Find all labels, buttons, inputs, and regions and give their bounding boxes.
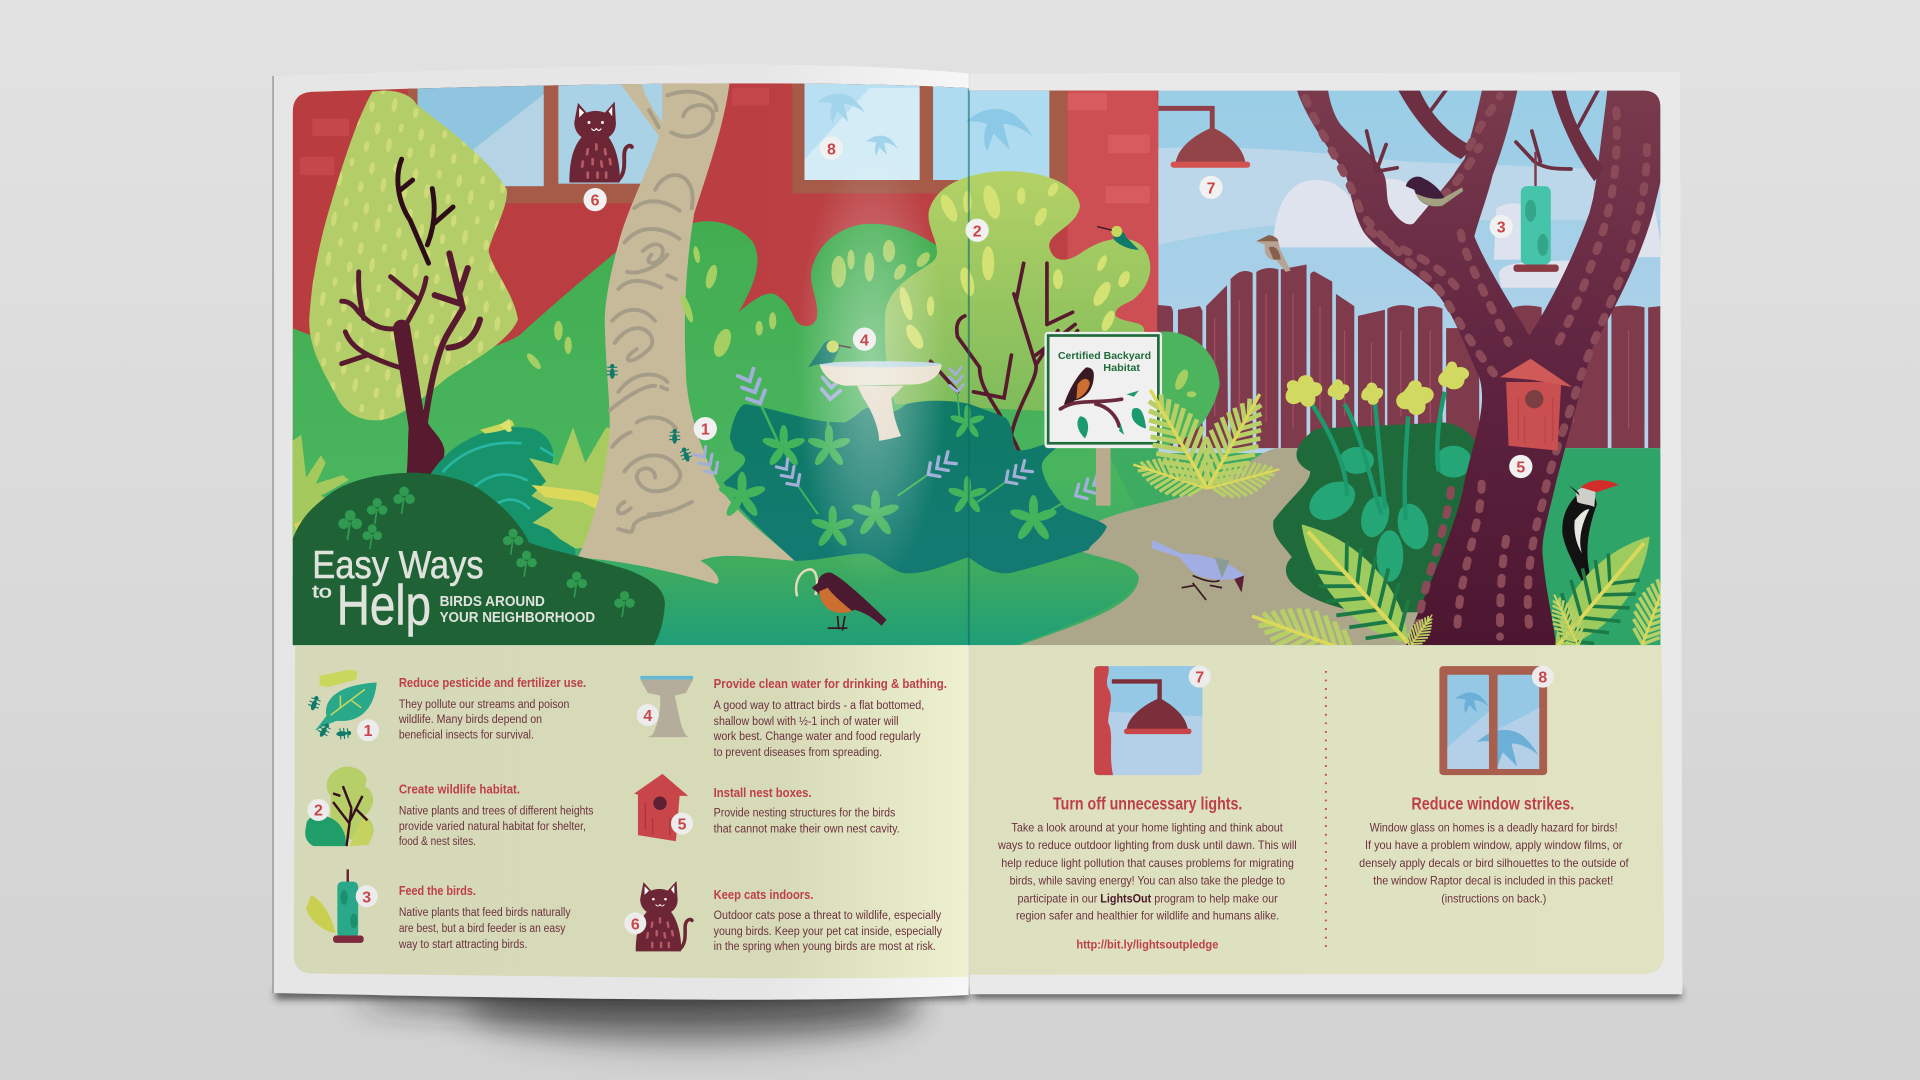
window text: (instructions on back.) [1441, 891, 1546, 905]
tip 5 icon [634, 774, 693, 841]
tip 3 text: Feed the birds. [399, 884, 476, 898]
lamp icon 7: 7 [1195, 670, 1204, 687]
wall lamp [1158, 108, 1250, 168]
beetles on trunk [607, 364, 694, 464]
lights text: birds, while saving energy! You can also take the pledge to [1010, 874, 1285, 888]
tip 4 text: Provide clean water for drinking & bathing. [714, 677, 947, 691]
left window [408, 81, 662, 203]
tip 4 text: shallow bowl with ½-1 inch of water will [714, 715, 899, 728]
window text: Reduce window strikes. [1411, 793, 1574, 813]
tip 2 icon: 2 [314, 803, 323, 820]
hummingbird at bath [808, 340, 851, 367]
map number badges: 1 [701, 422, 710, 439]
tip 6 text: Keep cats indoors. [714, 888, 813, 902]
map number badges: 4 [860, 332, 869, 349]
feeder [1513, 152, 1559, 272]
window text: If you have a problem window, apply window films, or [1365, 838, 1622, 852]
right lawn [1542, 448, 1660, 646]
tip 5 icon: 5 [678, 816, 687, 833]
cat in window [569, 102, 632, 182]
panel: left page sheet [273, 65, 969, 1000]
lights text: region safer and healthier for wildlife and humans alike. [1016, 909, 1279, 923]
tip 6 text [714, 888, 942, 953]
tip 3 text [398, 884, 571, 951]
dotted divider [1325, 671, 1327, 954]
tip 2 text: food & nest sites. [399, 835, 476, 848]
panel: right page sheet [970, 72, 1682, 994]
tip 6 text: in the spring when young birds are most at risk. [714, 940, 936, 953]
shrub: title background [293, 473, 665, 645]
tip 1 text [398, 676, 586, 741]
tip 2 text: Native plants and trees of different heights [399, 804, 594, 817]
tip 4 icon [637, 676, 693, 737]
clover leaves [338, 486, 635, 617]
clouds [1273, 179, 1660, 288]
grasshopper [480, 419, 514, 433]
fence [1157, 264, 1660, 448]
right window with decals [792, 76, 1068, 193]
brick column [1068, 76, 1161, 331]
blue jay [1152, 540, 1244, 600]
grey bird on branch [1406, 177, 1463, 206]
tip 5 text: Install nest boxes. [714, 786, 812, 800]
foreground ferns [1243, 501, 1688, 680]
lights text: help reduce light pollution that causes problems for migrating [1001, 856, 1294, 870]
robin with worm [796, 569, 887, 631]
green bush spots [525, 240, 933, 371]
tip 3 text: Native plants that feed birds naturally [399, 906, 571, 919]
tip 1 text: beneficial insects for survival. [399, 728, 534, 741]
tip 6 text: young birds. Keep your pet cat inside, especially [714, 925, 942, 938]
title [312, 544, 595, 636]
tip 4 icon: 4 [643, 708, 652, 725]
tip 1 text: Reduce pesticide and fertilizer use. [399, 676, 586, 690]
book shadow [276, 970, 1681, 1043]
tip 5 text: that cannot make their own nest cavity. [714, 823, 900, 836]
sign fern [1132, 389, 1280, 498]
sign: certified backyard habitat: Certified Backyard [1058, 350, 1151, 362]
tip 2 text: Create wildlife habitat. [399, 782, 520, 796]
teal swirl plant [429, 427, 576, 561]
hummingbird on bush [1097, 226, 1139, 250]
lights text: ways to reduce outdoor lighting from dusk until dawn. This will [997, 838, 1297, 852]
map number badges: 6 [591, 193, 600, 210]
lawn and hill [293, 221, 1139, 645]
tip 6 icon: 6 [631, 916, 640, 933]
bush branches [931, 263, 1078, 451]
map number badges: 2 [973, 223, 982, 240]
tip 4 text: work best. Change water and food regularly [713, 730, 921, 743]
title: BIRDS AROUND [440, 594, 545, 610]
yellow ferns left [293, 427, 612, 551]
grass bottom band [293, 553, 1139, 645]
window text: the window Raptor decal is included in this packet! [1373, 874, 1613, 888]
teal bush with lavender [694, 366, 1107, 573]
tip 2 text [399, 782, 594, 848]
nest box [1500, 359, 1572, 451]
lamp icon 7 [1094, 666, 1211, 775]
gutter highlight [796, 147, 948, 588]
tip 3 icon [306, 869, 378, 943]
title: Easy Ways [312, 544, 484, 587]
sparrow on fence [1256, 235, 1291, 272]
left tree [342, 159, 480, 478]
small bush behind sign [1157, 332, 1220, 447]
panel: right tips [970, 645, 1664, 975]
sign: certified backyard habitat: Habitat [1103, 362, 1141, 374]
tip 4 text [713, 677, 947, 759]
title: to [312, 582, 332, 602]
lights text [997, 793, 1297, 951]
tip 1 text: wildlife. Many birds depend on [398, 713, 542, 726]
tip 3 text: way to start attracting birds. [398, 938, 527, 951]
tip 1 icon [307, 670, 379, 741]
woodpecker [1562, 480, 1619, 587]
tip 3 text: are best, but a bird feeder is an easy [399, 922, 565, 935]
map number badges: 8 [827, 141, 836, 158]
left canopy [309, 91, 518, 420]
tip 4 text: to prevent diseases from spreading. [714, 746, 882, 759]
sign: certified backyard habitat [1044, 332, 1162, 506]
big birch trunk [578, 81, 795, 584]
brick wall [293, 73, 1160, 441]
window icon 8 [1439, 666, 1554, 775]
tip 1 icon: 1 [364, 723, 373, 740]
map number badges [583, 137, 1532, 478]
tip 6 text: Outdoor cats pose a threat to wildlife, especially [714, 909, 941, 922]
title: Help [337, 573, 431, 636]
garden path [1021, 448, 1418, 645]
tip 1 text: They pollute our streams and poison [399, 698, 569, 711]
tip 2 text: provide varied natural habitat for shelter, [399, 820, 586, 833]
tip 2 icon [305, 767, 374, 846]
tip 5 text [714, 786, 900, 836]
sky [1158, 73, 1663, 453]
lights text: participate in our LightsOut program to help make our [1018, 891, 1278, 905]
tip 5 text: Provide nesting structures for the birds [714, 807, 895, 820]
lime bush with hummingbird [885, 171, 1163, 416]
map number badges: 3 [1497, 220, 1506, 237]
window text: densely apply decals or bird silhouettes to the outside of [1359, 856, 1629, 870]
lights text: http://bit.ly/lightsoutpledge [1076, 937, 1219, 951]
right big tree [1296, 86, 1665, 645]
lights text: Turn off unnecessary lights. [1053, 793, 1242, 813]
dark leafy bush with flowers [1273, 361, 1486, 612]
title: YOUR NEIGHBORHOOD [440, 610, 595, 626]
window icon 8: 8 [1538, 670, 1547, 687]
map number badges: 5 [1516, 460, 1525, 477]
panel: left tips [294, 645, 969, 978]
window text: Window glass on homes is a deadly hazard for birds! [1370, 820, 1618, 834]
panel: backyard illustration [293, 73, 1688, 680]
tip 4 text: A good way to attract birds - a flat bottomed, [714, 699, 924, 712]
map number badges: 7 [1207, 180, 1216, 197]
lights text: Take a look around at your home lighting and think about [1011, 820, 1283, 834]
window text [1359, 793, 1629, 905]
bird bath [819, 361, 942, 441]
tip 6 icon [624, 881, 692, 951]
tip 3 icon: 3 [362, 889, 371, 906]
ground base [293, 435, 1662, 649]
